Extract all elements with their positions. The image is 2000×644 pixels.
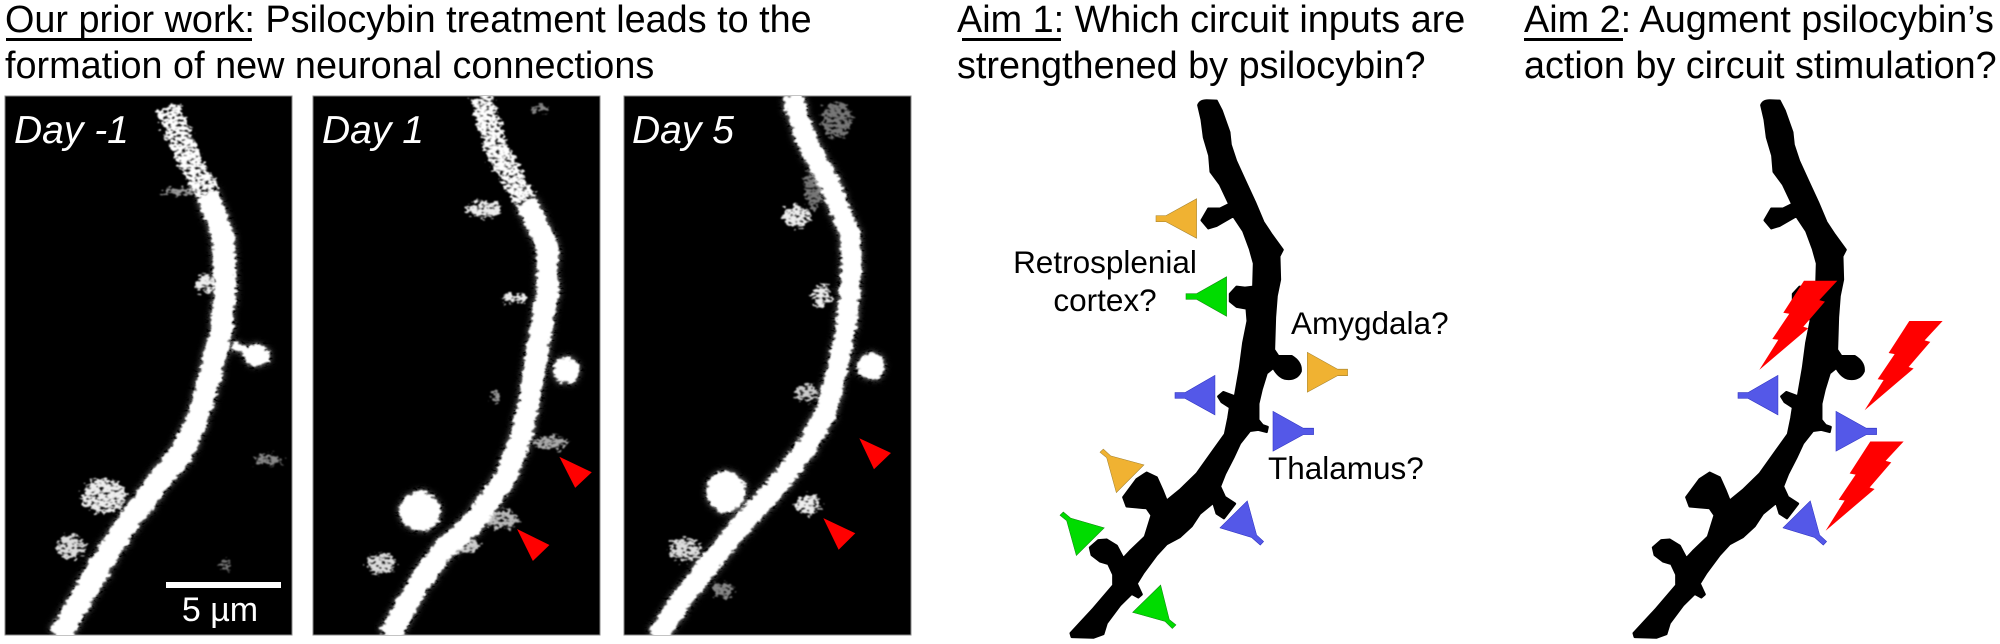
heading: aim 2: action by circuit stimulation? bbox=[1524, 45, 1997, 87]
panel: aim 1 diagram bbox=[1013, 101, 1449, 638]
green synaptic inputs bbox=[1060, 277, 1227, 629]
heading: our prior work bbox=[5, 0, 812, 87]
heading: aim 1: strengthened by psilocybin? bbox=[957, 45, 1426, 87]
panel: microscopy day 1 bbox=[313, 96, 600, 637]
panel: aim 2 diagram bbox=[1634, 101, 1943, 638]
label: amygdala: Amygdala? bbox=[1291, 305, 1449, 341]
label: retrosplenial cortex bbox=[1013, 244, 1197, 318]
scale bar: 5 µm bbox=[182, 591, 258, 629]
dendrite silhouette aim 2 bbox=[1634, 101, 1864, 638]
label: day -1: Day -1 bbox=[14, 109, 129, 152]
arrowheads: new spines day 5 bbox=[823, 438, 891, 550]
scale bar bbox=[166, 582, 281, 629]
dendrite image day 1 bbox=[366, 97, 579, 637]
label: retrosplenial cortex: cortex? bbox=[1053, 282, 1157, 318]
panel: microscopy day -1 bbox=[5, 96, 292, 637]
dendrite image day 5 bbox=[657, 94, 886, 638]
label: retrosplenial cortex: Retrosplenial bbox=[1013, 244, 1197, 280]
heading: aim 2 bbox=[1524, 0, 1997, 87]
dendrite image day -1 bbox=[57, 107, 283, 637]
arrowheads: new spines day 1 bbox=[517, 457, 592, 561]
heading: our prior work: Our prior work: Psilocybin treatment leads to the bbox=[5, 0, 812, 41]
heading: our prior work: formation of new neuronal connections bbox=[5, 45, 654, 87]
panel: microscopy day 5 bbox=[624, 94, 911, 638]
heading: aim 2: Aim 2: Augment psilocybin’s bbox=[1524, 0, 1994, 41]
heading: aim 1 bbox=[957, 0, 1465, 87]
blue synaptic inputs bbox=[1175, 375, 1314, 545]
label: day 1: Day 1 bbox=[322, 109, 424, 152]
lightning bolts: circuit stimulation bbox=[1759, 281, 1943, 531]
orange synaptic inputs bbox=[1100, 199, 1348, 493]
label: day 5: Day 5 bbox=[632, 109, 734, 152]
heading: aim 1: Aim 1: Which circuit inputs are bbox=[957, 0, 1465, 41]
label: thalamus: Thalamus? bbox=[1268, 450, 1424, 486]
blue synaptic inputs aim 2 bbox=[1738, 375, 1877, 545]
dendrite silhouette aim 1 bbox=[1071, 101, 1301, 638]
